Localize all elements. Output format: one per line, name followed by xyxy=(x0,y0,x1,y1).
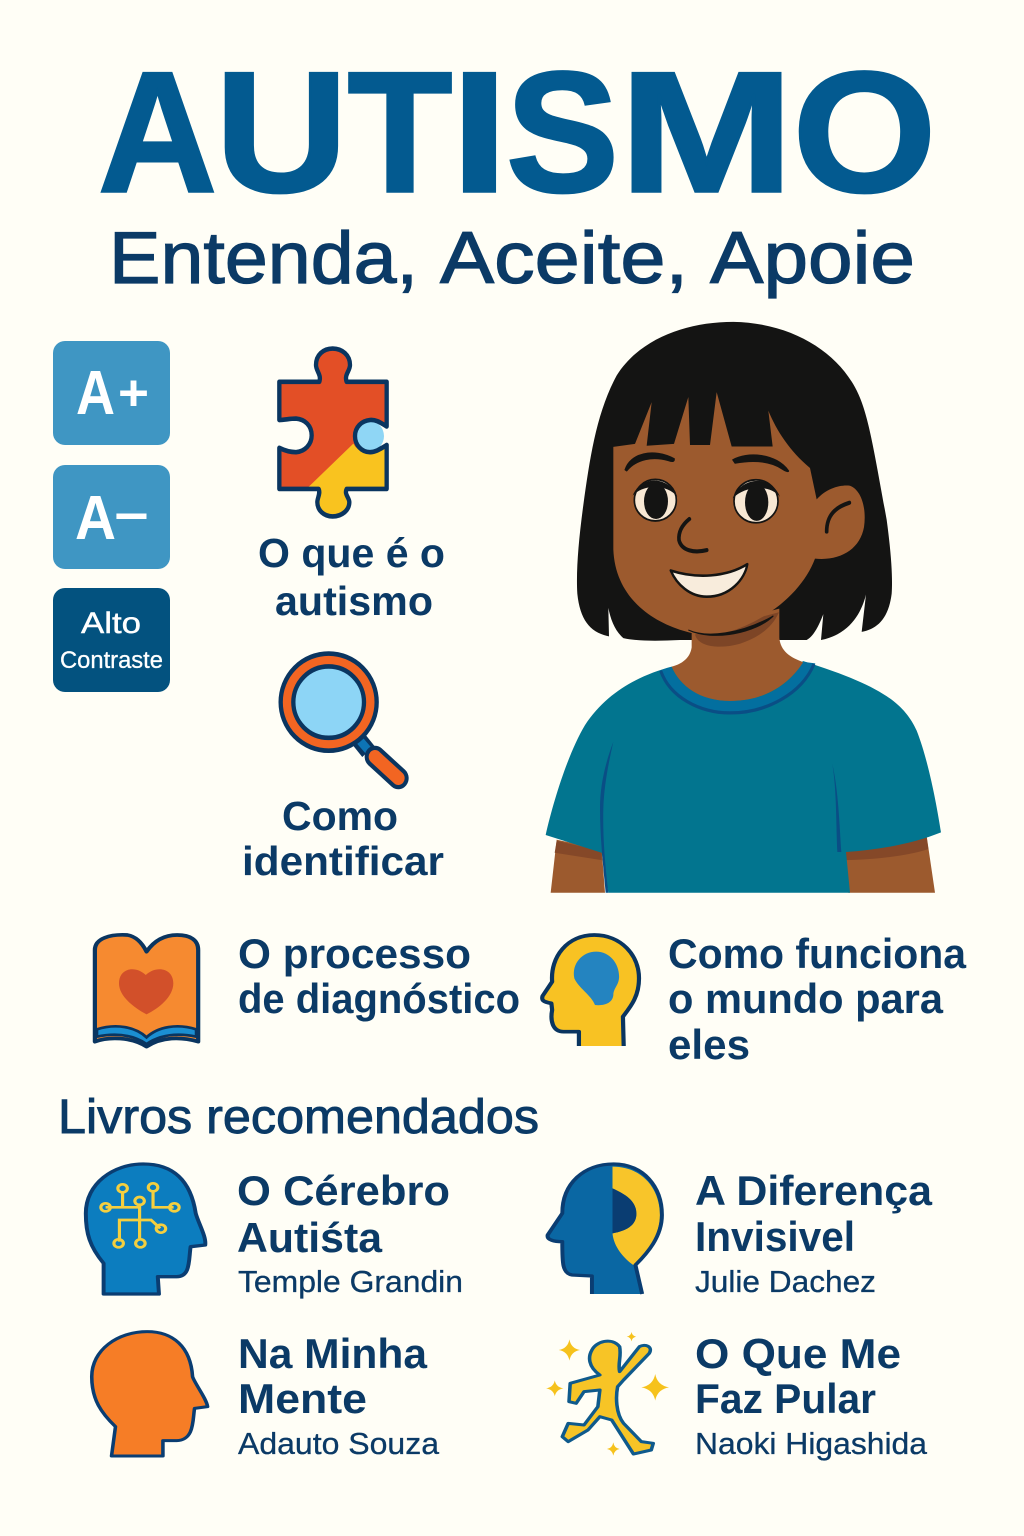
text xyxy=(695,1330,928,1461)
eyebrows xyxy=(625,453,789,472)
shirt xyxy=(546,661,941,893)
text: Temple Grandin xyxy=(238,1264,463,1299)
label: como identificar: identificar xyxy=(242,838,444,884)
icon: jumping child with sparkles xyxy=(546,1332,669,1456)
label: o que é o autismo xyxy=(258,530,445,624)
subtitle xyxy=(109,218,915,299)
button: increase font: A xyxy=(76,359,115,428)
button: decrease font xyxy=(53,465,170,569)
book: a diferença invisível xyxy=(548,1164,933,1299)
title xyxy=(98,36,936,228)
label: como identificar xyxy=(242,793,444,884)
subtitle: Apoie xyxy=(710,218,915,299)
title: A xyxy=(98,36,217,228)
ear line xyxy=(827,503,849,532)
icon: orange head xyxy=(92,1332,208,1456)
text: Autiśta xyxy=(237,1214,383,1261)
label: o que é o autismo: O que é o xyxy=(258,530,445,576)
subtitle: Aceite, xyxy=(440,218,688,299)
book: o cérebro autista xyxy=(86,1164,463,1299)
eyes xyxy=(633,479,780,523)
icon: two-tone head xyxy=(548,1164,662,1294)
text: eles xyxy=(668,1021,750,1068)
book: na minha mente xyxy=(92,1330,440,1461)
text: O Que Me xyxy=(695,1330,901,1377)
text: de diagnóstico xyxy=(238,975,520,1022)
mouth xyxy=(671,564,747,597)
text: Na Minha xyxy=(238,1330,428,1377)
book: o que me faz pular xyxy=(546,1330,928,1461)
illustration: smiling girl xyxy=(546,322,941,893)
text: Como funciona xyxy=(668,930,967,977)
button: decrease font: − xyxy=(114,488,149,544)
face and ear xyxy=(613,392,865,635)
title: T xyxy=(348,36,452,228)
button: increase font xyxy=(53,341,170,445)
button: increase font: + xyxy=(118,365,149,421)
text: Naoki Higashida xyxy=(695,1426,928,1461)
title: U xyxy=(215,36,348,228)
button: high contrast: Alto xyxy=(81,607,141,640)
icon: magnifying glass xyxy=(281,654,398,778)
hair xyxy=(577,322,892,641)
icon: head with circuit xyxy=(86,1164,205,1294)
text: o mundo para xyxy=(668,975,944,1022)
button: high contrast xyxy=(53,588,170,692)
text xyxy=(238,930,520,1022)
button: high contrast: Contraste xyxy=(60,647,163,674)
label: como identificar: Como xyxy=(282,793,398,839)
text: A Diferença xyxy=(695,1167,933,1214)
text: Mente xyxy=(238,1375,367,1422)
heading: livros recomendados: Livros recomendados xyxy=(58,1091,539,1144)
icon: puzzle piece xyxy=(279,349,387,516)
arms xyxy=(551,836,935,893)
label: o que é o autismo: autismo xyxy=(275,578,433,624)
nose xyxy=(679,519,707,551)
subtitle: Entenda, xyxy=(109,218,418,299)
item: como funciona o mundo para eles xyxy=(542,930,967,1068)
text xyxy=(237,1167,463,1299)
shirt seams xyxy=(600,742,613,893)
collar xyxy=(659,662,815,714)
text: Adauto Souza xyxy=(238,1426,440,1461)
icon: head with brain xyxy=(542,935,639,1046)
title: O xyxy=(792,36,936,228)
title: M xyxy=(619,36,794,228)
icon: book with heart xyxy=(95,935,198,1047)
text xyxy=(668,930,967,1068)
button: decrease font: A xyxy=(75,484,116,553)
text: O processo xyxy=(238,930,471,977)
jaw line xyxy=(688,616,773,635)
title: I xyxy=(450,36,508,228)
text: Faz Pular xyxy=(695,1375,876,1422)
title: S xyxy=(506,36,619,228)
panel: accessibility buttons xyxy=(53,341,170,692)
neck xyxy=(672,609,803,701)
text: Invisivel xyxy=(695,1213,855,1260)
text: O Cérebro xyxy=(237,1167,450,1214)
text xyxy=(238,1330,440,1461)
text: Julie Dachez xyxy=(695,1264,876,1299)
text xyxy=(695,1167,933,1299)
item: o processo de diagnóstico xyxy=(95,930,520,1047)
